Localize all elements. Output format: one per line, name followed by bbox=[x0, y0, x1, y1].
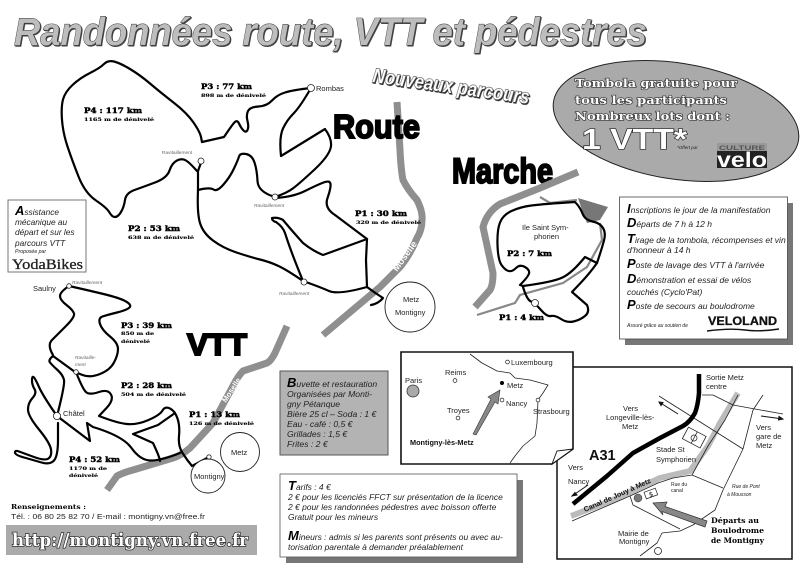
place labels: Symphorien bbox=[656, 455, 696, 464]
place labels: Stade St bbox=[656, 445, 686, 454]
callout: tombola: Tombola gratuite pour bbox=[575, 77, 737, 90]
route labels: 1165 m de dénivelé bbox=[84, 116, 154, 123]
logo: culture velo bbox=[717, 143, 767, 172]
canal bbox=[477, 223, 602, 315]
callout: tombola: tous les participants bbox=[575, 94, 727, 107]
place labels: Vers bbox=[623, 404, 638, 413]
map: France location bbox=[401, 352, 573, 464]
panel: informations: Poste de lavage des VTT à l'arrivée bbox=[627, 256, 765, 271]
place labels: Ravitaille- bbox=[75, 355, 96, 361]
place labels: Longeville-lès- bbox=[606, 413, 655, 422]
map: route rides bbox=[62, 61, 435, 335]
arrow: departs bbox=[653, 502, 707, 527]
direction arrows bbox=[572, 402, 783, 496]
panel: buvette bbox=[280, 371, 388, 455]
VTT labels: P2 : 28 km bbox=[121, 381, 172, 390]
route labels bbox=[84, 82, 421, 241]
logo: culture velo: velo bbox=[717, 149, 767, 172]
route labels: P1 : 30 km bbox=[355, 209, 407, 218]
panel: assistance: départ et sur les bbox=[15, 227, 74, 237]
panel: buvette: Buvette et restauration bbox=[287, 375, 377, 390]
callout: tombola bbox=[544, 44, 800, 198]
label: ile bbox=[522, 223, 569, 241]
panel: buvette: gny Pétanque bbox=[287, 399, 340, 409]
panel: tarifs: torisation parentale à demander préalablement bbox=[288, 542, 464, 552]
panel: buvette: Bière 25 cl – Soda : 1 € bbox=[287, 409, 378, 419]
panel: informations: Démonstration et essai de vélos bbox=[627, 271, 752, 286]
place labels bbox=[568, 373, 781, 546]
panel: informations: Assuré grâce au soutien de bbox=[626, 323, 688, 329]
route labels: 898 m de dénivelé bbox=[201, 92, 266, 99]
VTT labels: P3 : 39 km bbox=[121, 321, 172, 330]
circle: Metz Montigny: Metz bbox=[403, 295, 420, 304]
place labels: Metz bbox=[622, 422, 639, 431]
place labels: Mairie de bbox=[618, 529, 649, 538]
panel: buvette: Organisées par Monti- bbox=[287, 389, 372, 399]
circle: Metz: Metz bbox=[231, 448, 248, 457]
place labels: gare de bbox=[756, 432, 781, 441]
panel: tarifs: Mineurs : admis si les parents sont présents ou avec au- bbox=[288, 528, 503, 543]
label: departs bbox=[711, 516, 765, 545]
VTT points bbox=[53, 284, 211, 459]
panel: buvette: Frites : 2 € bbox=[287, 439, 329, 449]
map: access bbox=[557, 367, 792, 559]
label: P1: P1 : 4 km bbox=[499, 313, 544, 322]
label: P2: P2 : 7 km bbox=[507, 249, 552, 258]
panel: informations: Poste de secours au boulodrome bbox=[627, 297, 755, 312]
icon: parking: $ bbox=[648, 491, 654, 499]
panel: tarifs: Gratuit pour les mineurs bbox=[288, 512, 379, 522]
river: road bbox=[475, 172, 578, 307]
logo: Veloland: VELOLAND bbox=[708, 316, 777, 328]
title: Randonnées route, VTT et pédestres bbox=[14, 11, 647, 54]
start point bbox=[532, 300, 538, 306]
place labels: canal bbox=[671, 488, 683, 494]
VTT labels: 850 m de bbox=[121, 331, 154, 337]
place labels: Ravitaillement bbox=[72, 280, 103, 286]
canal bbox=[571, 393, 738, 516]
place labels: Metz bbox=[756, 441, 773, 450]
panel: tarifs: 2 € pour les randonnées pédestres avec boisson offerte bbox=[287, 502, 497, 512]
panel: informations: Départs de 7 h à 12 h bbox=[627, 215, 712, 230]
heading: Route: Route bbox=[333, 108, 420, 145]
walking paths bbox=[497, 202, 605, 322]
panel: tarifs bbox=[280, 474, 523, 563]
VTT labels: P4 : 52 km bbox=[69, 455, 120, 464]
cities: Strasbourg bbox=[533, 407, 570, 416]
VTT labels: dénivelé bbox=[121, 338, 150, 345]
heading: nouveaux parcours: Nouveaux parcours bbox=[371, 65, 531, 109]
panel: buvette: Eau - café : 0,5 € bbox=[287, 419, 354, 429]
place labels: ment bbox=[75, 362, 86, 368]
label: departs: Départs au bbox=[711, 516, 759, 525]
place labels: Ravitaillement bbox=[254, 203, 285, 209]
cities: Luxembourg bbox=[511, 358, 553, 367]
icon: parking bbox=[644, 488, 658, 500]
VTT labels: P1 : 13 km bbox=[189, 410, 240, 419]
logo: culture velo: CULTURE bbox=[719, 145, 766, 152]
cities: Metz bbox=[507, 381, 524, 390]
streets bbox=[572, 395, 783, 556]
panel: tarifs: 2 € pour les licenciés FFCT sur présentation de la licence bbox=[287, 492, 503, 502]
cities: Nancy bbox=[506, 399, 528, 408]
route paths bbox=[62, 61, 383, 305]
page fold bbox=[552, 449, 573, 464]
place labels: Rue de Pont bbox=[732, 484, 760, 490]
VTT labels: dénivelé bbox=[69, 472, 98, 479]
VTT labels: 126 m de dénivelé bbox=[189, 420, 254, 427]
place labels: Vers bbox=[756, 423, 771, 432]
circle: Metz bbox=[220, 432, 260, 472]
VTT paths bbox=[15, 286, 209, 466]
label: ile: Ile Saint Sym- bbox=[522, 223, 569, 232]
cities: Troyes bbox=[447, 406, 470, 415]
label: ile: phorien bbox=[534, 232, 559, 241]
VTT labels bbox=[69, 321, 254, 479]
panel: tarifs: Tarifs : 4 € bbox=[288, 478, 332, 493]
text: renseignements bbox=[11, 503, 205, 521]
boulodrome marker bbox=[634, 494, 642, 502]
cities: Reims bbox=[445, 368, 467, 377]
place labels: Ravitaillement bbox=[279, 291, 310, 297]
label: departs: Boulodrome bbox=[711, 526, 765, 535]
mairie marker bbox=[654, 548, 662, 554]
circle: Metz Montigny: Montigny bbox=[395, 308, 426, 317]
place labels: Ravitaillement bbox=[162, 150, 193, 156]
cities bbox=[405, 358, 570, 420]
panel: informations: Tirage de la tombola, récompenses et vin bbox=[627, 231, 786, 246]
VTT labels: 504 m de dénivelé bbox=[121, 391, 186, 398]
place labels bbox=[33, 280, 103, 418]
label: Montigny-lès-Metz: Montigny-lès-Metz bbox=[410, 438, 474, 447]
label: canal: Canal de Jouy à Metz bbox=[582, 476, 653, 514]
panel: assistance bbox=[8, 200, 86, 273]
panel: informations: Inscriptions le jour de la manifestation bbox=[627, 201, 771, 216]
heading: Marche: Marche bbox=[452, 152, 553, 191]
label: Moselle: Moselle bbox=[391, 239, 420, 274]
A31 motorway bbox=[573, 374, 699, 504]
panel: assistance: parcours VTT bbox=[14, 238, 66, 248]
label: Moselle: Moselle bbox=[220, 376, 243, 404]
circle: Montigny bbox=[191, 459, 225, 493]
route labels: P4 : 117 km bbox=[84, 106, 142, 115]
place labels bbox=[162, 84, 344, 297]
label: A31: A31 bbox=[589, 448, 616, 464]
cities: Paris bbox=[405, 376, 422, 385]
VTT labels: 1170 m de bbox=[69, 466, 107, 472]
banner: website: http://montigny.vn.free.fr bbox=[12, 530, 248, 551]
callout: tombola: *Offert par bbox=[677, 145, 698, 150]
logo: YodaBikes: YodaBikes bbox=[12, 257, 83, 273]
arrow bbox=[473, 390, 500, 435]
place labels: Sortie Metz bbox=[706, 373, 744, 382]
place labels: Montigny bbox=[619, 537, 650, 546]
panel: buvette: Grillades : 1,5 € bbox=[287, 429, 348, 439]
river: Moselle (route) bbox=[323, 102, 422, 335]
place labels: Saulny bbox=[33, 284, 56, 293]
panel: informations bbox=[620, 197, 793, 345]
panel: assistance: Proposée par bbox=[15, 249, 46, 255]
dark area bbox=[578, 198, 608, 223]
place labels: à Mousson bbox=[727, 492, 752, 498]
river: Moselle (VTT) bbox=[107, 326, 287, 490]
panel: informations: d'honneur à 14 h bbox=[627, 245, 691, 255]
map: marche bbox=[475, 172, 608, 322]
place labels: Nancy bbox=[568, 477, 590, 486]
border lines bbox=[470, 354, 548, 463]
circle: Montigny: Montigny bbox=[194, 472, 225, 481]
text: renseignements: Tél. : 06 80 25 82 70 / E-mail : montigny.vn@free.fr bbox=[11, 512, 205, 521]
panel: informations: couchés (Cyclo'Pat) bbox=[627, 287, 702, 297]
panel: assistance: mécanique au bbox=[15, 217, 68, 227]
ravitaillement points bbox=[198, 84, 314, 285]
route labels: P2 : 53 km bbox=[128, 224, 180, 233]
place labels: Châtel bbox=[63, 409, 85, 418]
place labels: centre bbox=[706, 382, 727, 391]
place labels: Vers bbox=[568, 463, 583, 472]
route labels: 320 m de dénivelé bbox=[356, 219, 421, 226]
text: renseignements: Renseignements : bbox=[11, 503, 86, 511]
place labels: Rombas bbox=[316, 84, 344, 93]
route labels: 638 m de dénivelé bbox=[128, 234, 194, 241]
panel: assistance: Assistance bbox=[14, 203, 59, 218]
circle: Metz Montigny bbox=[385, 282, 435, 332]
place labels: Rue du bbox=[671, 482, 687, 488]
callout: tombola: 1 VTT* bbox=[582, 124, 688, 156]
callout: tombola: Nombreux lots dont : bbox=[575, 110, 730, 123]
banner: website bbox=[6, 525, 257, 555]
icon: stadium bbox=[682, 427, 706, 448]
heading: VTT: VTT bbox=[187, 327, 247, 362]
label: departs: de Montigny bbox=[711, 536, 765, 545]
route labels: P3 : 77 km bbox=[201, 82, 252, 91]
map: VTT bbox=[15, 280, 287, 493]
